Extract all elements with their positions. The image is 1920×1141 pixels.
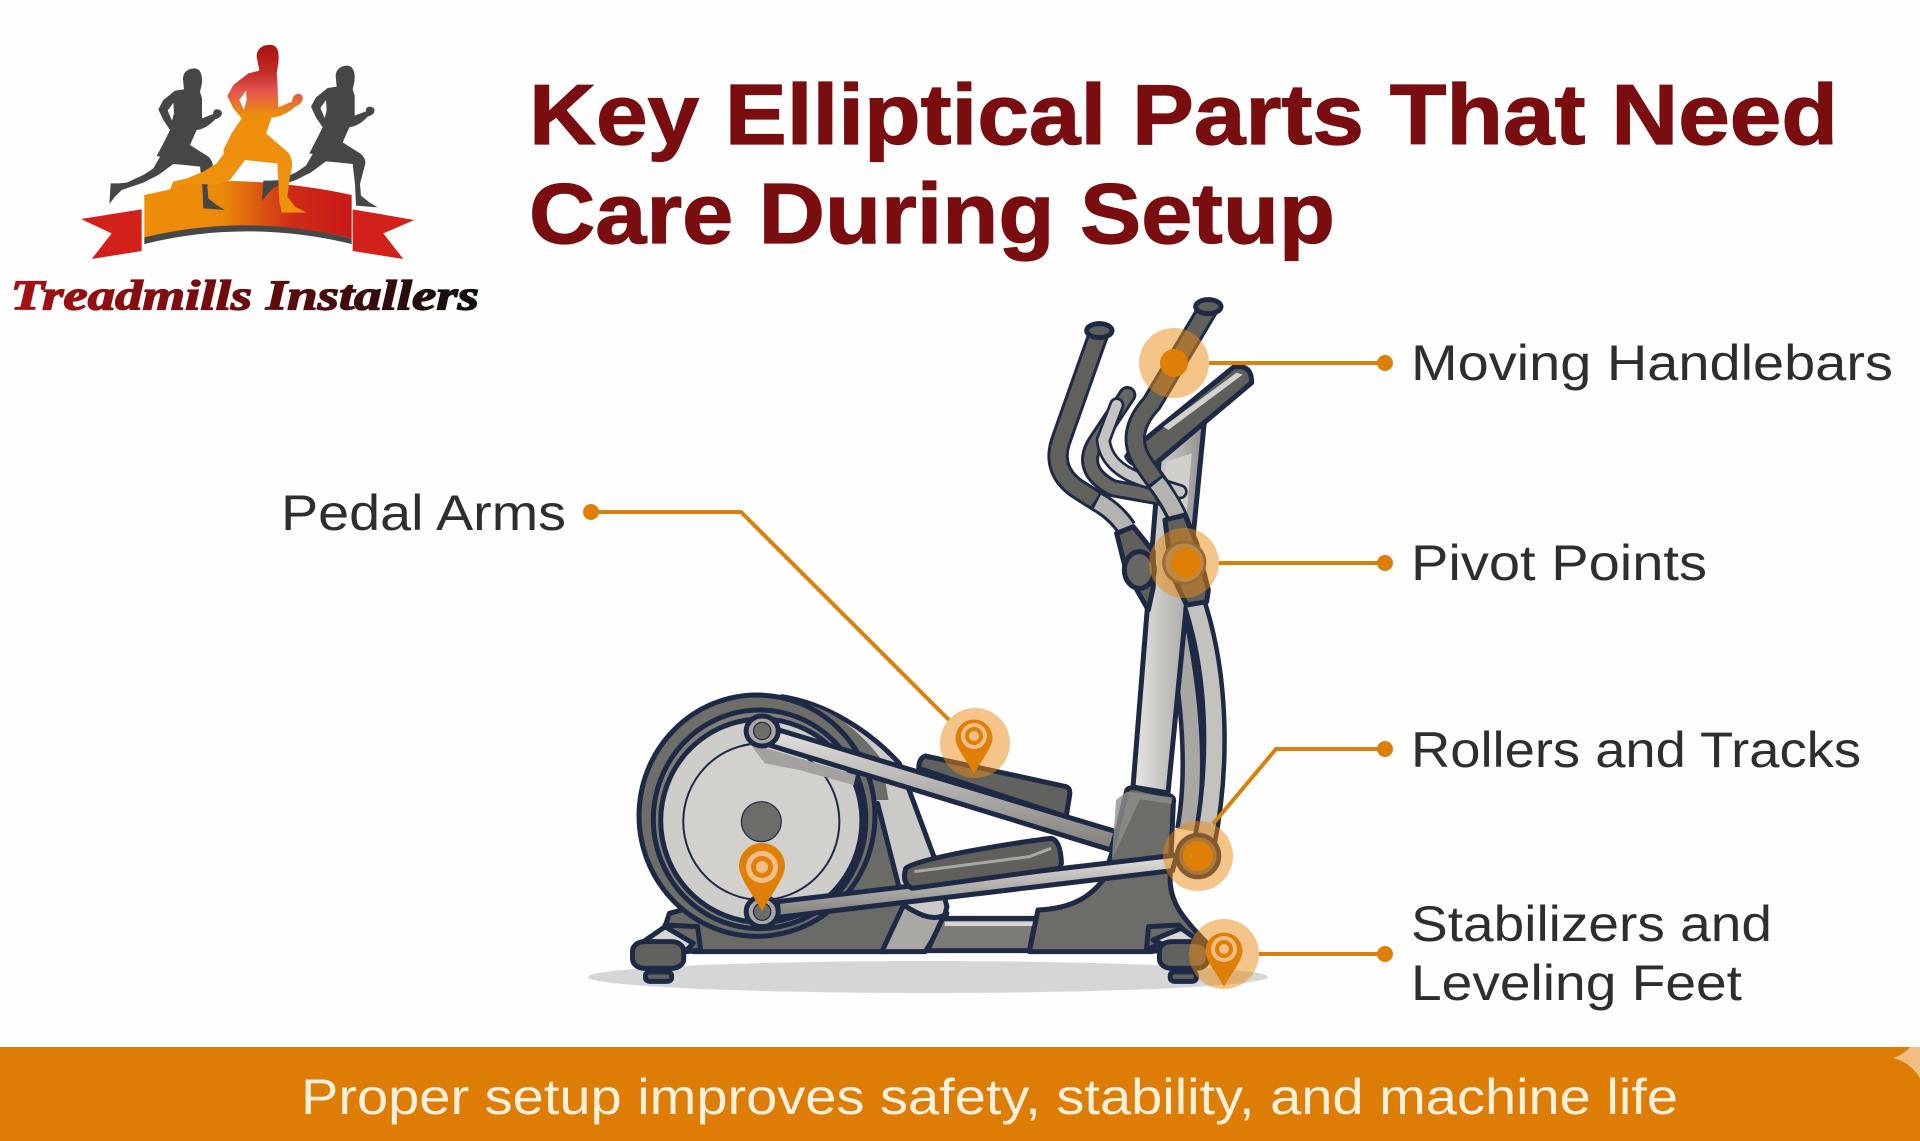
logo runner centre bbox=[172, 45, 307, 213]
callout: Pedal Arms bbox=[281, 485, 1010, 778]
rear curved tube bbox=[1172, 600, 1192, 830]
callout: Stabilizers and Leveling Feet: Leveling Feet bbox=[1411, 955, 1742, 1011]
callout: Pivot Points bbox=[1149, 528, 1707, 598]
console bbox=[1127, 367, 1252, 465]
callout: Rollers and Tracks: Rollers and Tracks bbox=[1411, 722, 1861, 778]
lower pedal arm and pedal bbox=[633, 716, 1208, 981]
logo ribbon bbox=[81, 181, 414, 259]
upper pedal bbox=[919, 756, 1070, 817]
map pin bbox=[956, 720, 992, 774]
logo wordmark: Treadmills Installers bbox=[11, 272, 479, 319]
front curved tube bbox=[1195, 605, 1214, 845]
logo runner right bbox=[262, 66, 378, 207]
callout: Pedal Arms: Pedal Arms bbox=[281, 485, 566, 541]
callout: Stabilizers and Leveling Feet bbox=[1189, 896, 1772, 1011]
mast bbox=[1133, 415, 1205, 793]
left moving handlebar bbox=[1058, 332, 1127, 528]
title: Care During Setup bbox=[529, 167, 1335, 262]
flywheel map pin bbox=[739, 843, 785, 911]
callout: Moving Handlebars bbox=[1139, 328, 1893, 398]
handlebars bbox=[1058, 300, 1252, 610]
lower frame and flywheel bbox=[639, 695, 1207, 952]
pivot housing bbox=[1165, 515, 1208, 605]
logo: Treadmills Installers bbox=[11, 45, 479, 319]
elliptical machine illustration bbox=[588, 300, 1268, 993]
bottom banner: Proper setup improves safety, stability, and machine life bbox=[301, 1069, 1678, 1125]
middle handle bbox=[1090, 395, 1160, 497]
bottom banner bbox=[0, 1047, 1920, 1141]
callout: Moving Handlebars: Moving Handlebars bbox=[1411, 335, 1893, 391]
title: Key Elliptical Parts That Need bbox=[529, 68, 1838, 163]
flywheel bbox=[639, 695, 875, 936]
title bbox=[529, 68, 1838, 262]
callout: Pivot Points: Pivot Points bbox=[1411, 535, 1707, 591]
front tower bbox=[1029, 788, 1207, 952]
floor shadow bbox=[588, 961, 1268, 993]
centre crossbar bbox=[927, 918, 1036, 951]
callout: Stabilizers and Leveling Feet: Stabilizers and bbox=[1411, 896, 1772, 952]
upper pedal arm bbox=[769, 728, 1116, 850]
map pin bbox=[1206, 932, 1242, 987]
callout: Rollers and Tracks bbox=[1163, 722, 1861, 891]
right moving handlebar bbox=[1135, 308, 1208, 537]
arm pivots bbox=[746, 716, 778, 746]
logo runner left bbox=[109, 68, 225, 210]
roller hub bbox=[1177, 835, 1219, 877]
feet bbox=[665, 925, 701, 952]
